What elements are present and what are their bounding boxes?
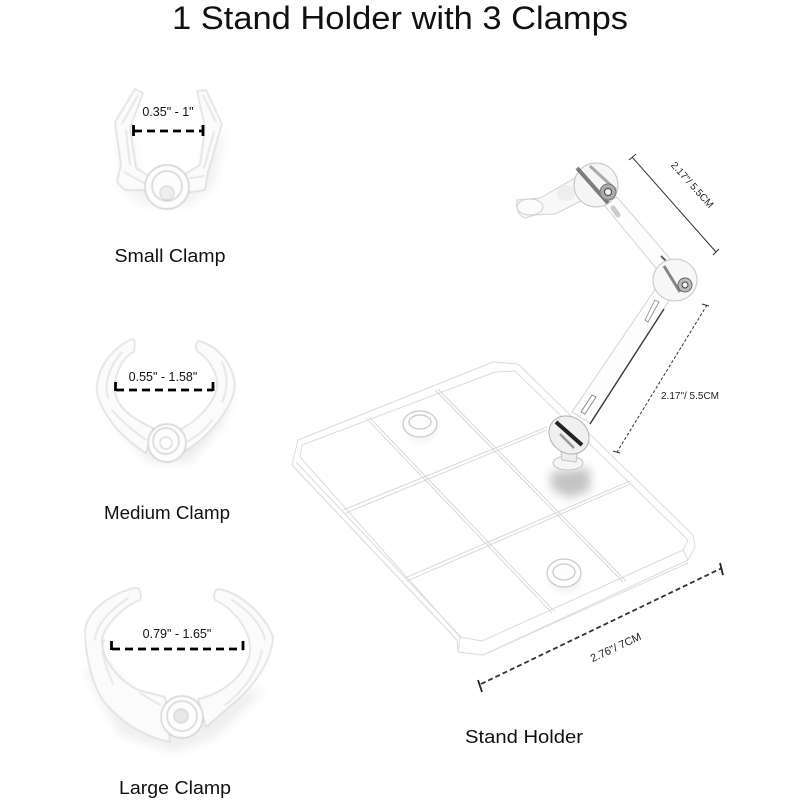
top joint	[574, 163, 618, 207]
title: 1 Stand Holder with 3 Clamps	[172, 0, 628, 36]
dimension: lower arm: 2.17"/ 5.5CM	[661, 391, 719, 402]
peg: lower	[547, 559, 581, 593]
medium clamp body	[97, 339, 236, 462]
top clip	[517, 178, 583, 218]
lower arm	[572, 288, 672, 424]
dimension: base width: 2.76"/ 7CM	[589, 631, 643, 665]
medium clamp range	[116, 370, 213, 391]
small clamp range: 0.35" - 1"	[142, 105, 194, 119]
large clamp label: Large Clamp	[119, 777, 231, 798]
stand arm	[517, 163, 697, 498]
dimension: lower arm	[613, 304, 719, 453]
small clamp range	[134, 105, 203, 136]
large clamp range: 0.79" - 1.65"	[143, 627, 211, 641]
large clamp	[85, 588, 273, 798]
dimension: base width	[478, 563, 723, 692]
bottom joint	[541, 408, 597, 470]
middle joint	[653, 259, 697, 301]
small clamp body	[115, 89, 226, 209]
small clamp	[114, 89, 226, 266]
contact shadow	[550, 468, 590, 498]
dimension: upper arm: 2.17"/ 5.5CM	[668, 160, 715, 211]
peg: upper	[403, 411, 437, 442]
medium clamp	[97, 339, 236, 523]
stand holder label: Stand Holder	[465, 726, 583, 747]
stand holder base plate	[292, 362, 695, 655]
medium clamp range: 0.55" - 1.58"	[129, 370, 197, 384]
large clamp range	[112, 627, 243, 650]
large clamp body	[85, 588, 273, 752]
small clamp label: Small Clamp	[114, 245, 226, 266]
upper arm	[604, 197, 673, 273]
medium clamp label: Medium Clamp	[104, 502, 230, 523]
dimension: upper arm	[629, 154, 719, 255]
